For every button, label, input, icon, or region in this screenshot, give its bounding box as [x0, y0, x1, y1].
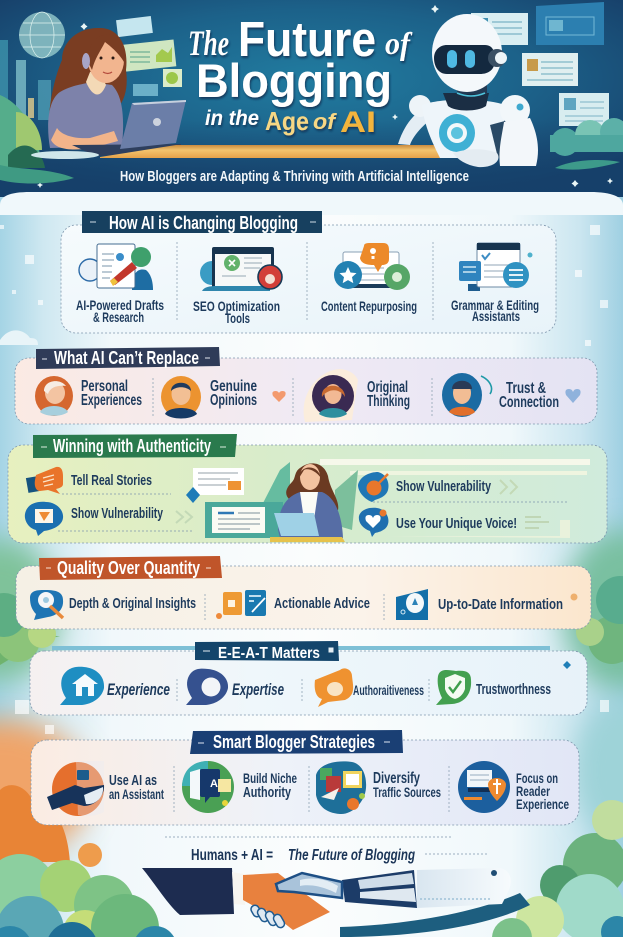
- label: Original: [367, 379, 408, 396]
- heading banner: Winning with Authenticity: [53, 436, 211, 456]
- body top edge: [0, 192, 623, 215]
- label: Trust &: [506, 380, 546, 397]
- human sleeve: [142, 868, 234, 915]
- label: Build Niche: [243, 770, 297, 786]
- icon: expertise bubble: [186, 669, 228, 705]
- icon: house bubble: [60, 667, 104, 705]
- icon: diamond: [186, 487, 200, 503]
- panel: Smart Blogger Strategies: [31, 730, 579, 825]
- label: Experience: [107, 680, 170, 699]
- label: Up-to-Date Information: [438, 596, 563, 613]
- card: envelope note: [193, 468, 244, 495]
- illustration: laptop: [72, 100, 186, 156]
- icon: diamond: [563, 661, 571, 669]
- label: Use Your Unique Voice!: [396, 515, 517, 532]
- label: Show Vulnerability: [71, 505, 163, 522]
- desk: [100, 145, 440, 158]
- header banner: [0, 0, 623, 197]
- label: Tell Real Stories: [71, 472, 152, 489]
- title: The: [188, 23, 229, 63]
- icon: speech bubble: [26, 467, 63, 494]
- chest circle: [439, 114, 475, 152]
- label: Experience: [516, 796, 569, 812]
- heading banner: [39, 556, 222, 580]
- white robot arm: [417, 868, 511, 908]
- label: Personal: [81, 378, 128, 395]
- icon: AI assistant: [47, 761, 104, 816]
- label: & Research: [93, 309, 144, 325]
- label: an Assistant: [109, 786, 164, 802]
- heading banner: Smart Blogger Strategies: [213, 732, 375, 752]
- illustration: woman at laptop: [270, 463, 358, 542]
- collar and neck: [443, 93, 489, 110]
- label: Assistants: [472, 308, 520, 324]
- plate: [31, 151, 99, 159]
- robot forearm: [342, 870, 417, 908]
- chevrons: [176, 511, 192, 523]
- icon: SEO laptop: [200, 247, 282, 291]
- subtitle: How Bloggers are Adapting & Thriving with Artificial Intelligence: [120, 169, 469, 185]
- bushes left: [0, 95, 74, 184]
- human hand: [243, 873, 330, 930]
- avatar: personal experiences: [35, 376, 73, 416]
- left arm: [398, 108, 430, 145]
- title: Age: [265, 106, 309, 136]
- icon: niche authority: A: [210, 778, 218, 790]
- city skyline: [0, 40, 51, 120]
- label: Trustworthness: [476, 682, 551, 698]
- label: Authoraitiveness: [353, 682, 424, 698]
- head: [432, 14, 502, 92]
- hand: [453, 149, 498, 167]
- panel: What AI Can't Replace: [15, 347, 597, 424]
- footer tagline: The Future of Blogging: [288, 847, 415, 864]
- icon: heart: [565, 389, 581, 403]
- icon: traffic sources: [316, 761, 366, 814]
- heading banner: What AI Can’t Replace: [54, 348, 199, 368]
- icon: authority bubble: [315, 668, 353, 707]
- bushes right: [550, 118, 623, 170]
- icon: drafts: [79, 244, 153, 290]
- scene: lower landscape: [0, 576, 623, 937]
- title: [188, 13, 413, 139]
- label: Depth & Original Insights: [69, 595, 196, 612]
- title: of: [385, 25, 413, 61]
- title: in the: [205, 107, 259, 130]
- heading banner: [190, 730, 403, 754]
- avatar: genuine opinions: [161, 376, 201, 418]
- label: AI-Powered Drafts: [76, 297, 164, 313]
- title: of: [313, 109, 338, 134]
- label: Authority: [243, 785, 291, 801]
- panel: E-E-A-T Matters: [30, 641, 587, 715]
- robot hand: [276, 873, 342, 898]
- label: SEO Optimization: [193, 298, 280, 314]
- label: Thinking: [367, 393, 410, 410]
- title: Blogging: [196, 54, 392, 107]
- icon: heart bubble: [359, 508, 388, 537]
- label: Grammar & Editing: [451, 297, 539, 313]
- sparkles: [37, 5, 613, 188]
- icon: vulnerability bubble: [25, 502, 63, 536]
- title: AI: [340, 106, 376, 139]
- heading banner: How AI is Changing Blogging: [109, 212, 298, 233]
- label: Use AI as: [109, 772, 157, 789]
- icon: up-to-date clock: [396, 589, 428, 620]
- icon: niche authority: [182, 761, 234, 813]
- icon: repurposing: [334, 243, 410, 290]
- label: Experiences: [81, 392, 142, 409]
- panel: Quality Over Quantity: [16, 556, 591, 629]
- label: Expertise: [232, 680, 284, 699]
- panel: Winning with Authenticity: [8, 434, 607, 543]
- icon: trust bubble: [436, 670, 471, 705]
- label: Show Vulnerability: [396, 478, 491, 495]
- icon: reader experience: [458, 761, 510, 813]
- heading banner: [33, 434, 237, 458]
- label: Tools: [225, 310, 250, 326]
- icon: gear magnifier: [30, 590, 63, 620]
- illustration: robot: [398, 14, 538, 167]
- right shoulder: [500, 95, 530, 125]
- heading banner: E-E-A-T Matters: [218, 645, 320, 662]
- icon: small heart: [272, 391, 286, 402]
- label: Connection: [499, 394, 559, 411]
- robot fingers: [250, 904, 286, 929]
- label: Focus on: [516, 770, 558, 786]
- white cuff: [232, 872, 245, 905]
- illustration: teal backdrop and article card: [205, 462, 290, 538]
- chevrons: [500, 480, 517, 494]
- illustration: human and robot handshake: [142, 868, 511, 930]
- heading banner: Quality Over Quantity: [57, 558, 200, 578]
- floating cards right: [471, 2, 609, 126]
- icon: actionable advice: [216, 590, 266, 619]
- label: Content Repurposing: [321, 298, 417, 314]
- icon: orange pin bubble: [358, 472, 389, 502]
- icon: grammar: [459, 243, 532, 291]
- torso: [422, 100, 504, 158]
- panel: How AI is Changing Blogging: [61, 211, 556, 333]
- label: Reader: [516, 783, 550, 799]
- right arm: [499, 118, 538, 166]
- footer tagline: [165, 837, 488, 864]
- heading banner: [195, 641, 339, 662]
- label: Opinions: [210, 392, 257, 409]
- avatar: original thinking: [304, 369, 358, 422]
- illustration: blogger woman: [48, 28, 127, 149]
- label: Traffic Sources: [373, 784, 441, 800]
- floating cards left: [116, 16, 182, 96]
- footer tagline: Humans + AI =: [191, 847, 273, 864]
- label: Actionable Advice: [274, 595, 370, 612]
- avatar: trust and connection: [442, 373, 492, 417]
- title: Future: [238, 13, 376, 67]
- icon: globe: [19, 12, 65, 58]
- label: Diversify: [373, 770, 420, 787]
- label: Genuine: [210, 378, 257, 395]
